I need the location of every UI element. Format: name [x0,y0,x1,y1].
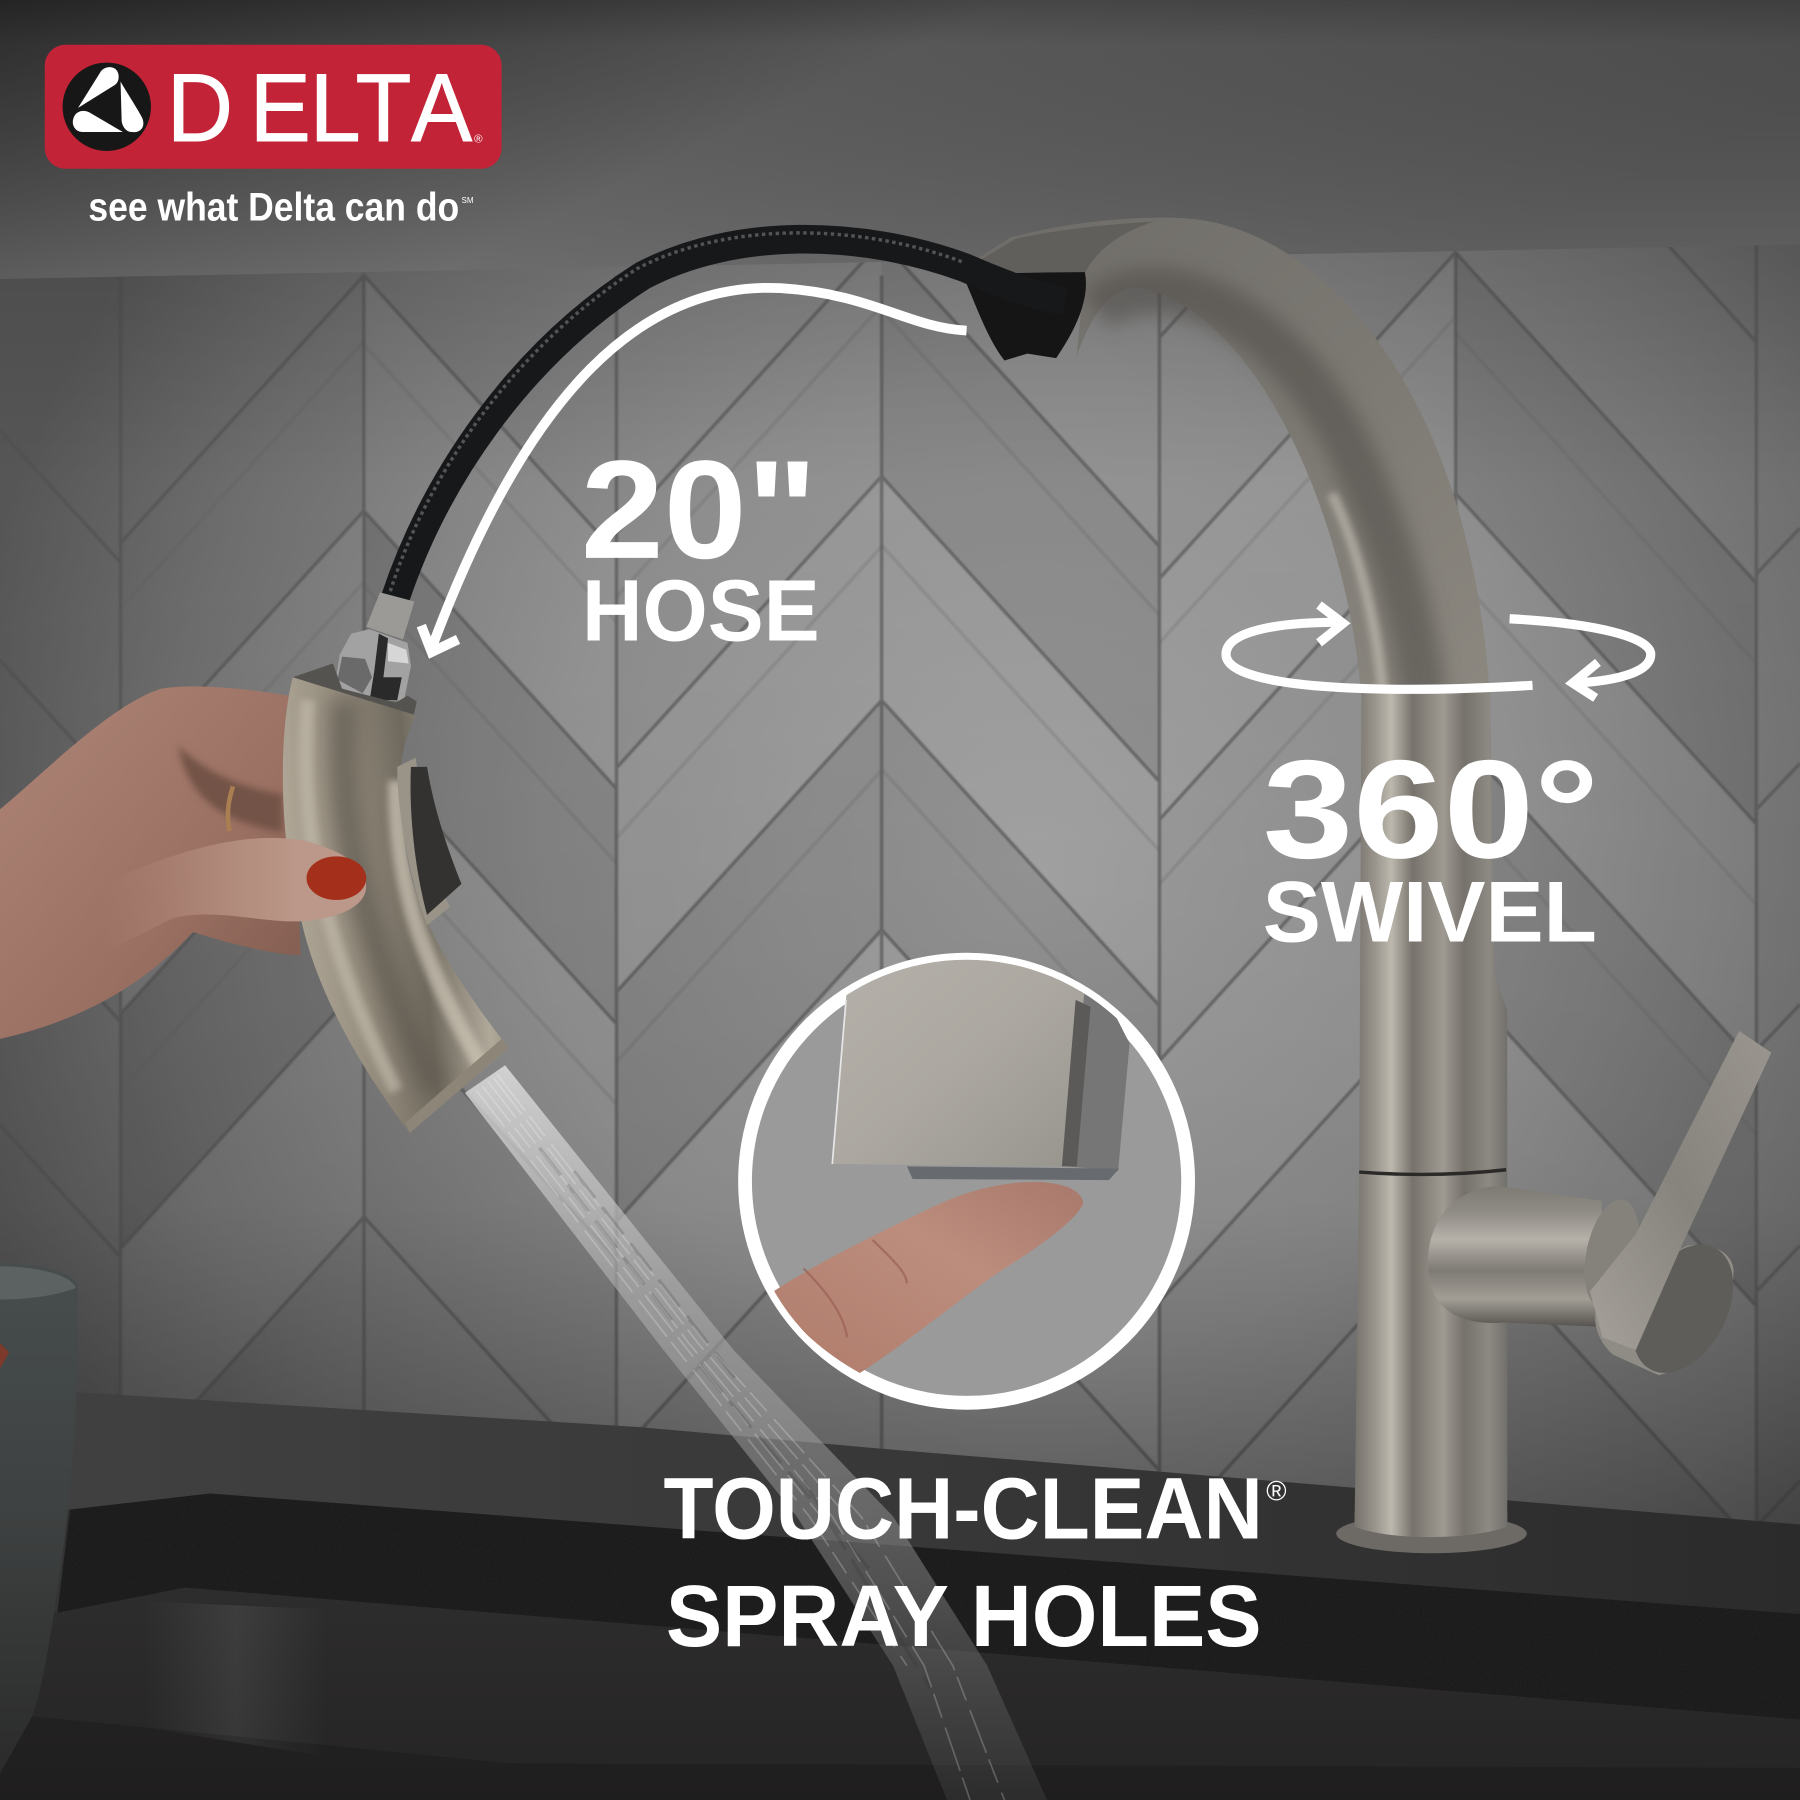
spray mode button [397,758,461,925]
water spray [465,1065,1047,1800]
chrome swivel nut [335,629,411,703]
hand [0,686,301,1039]
swivel collar seam [1359,1170,1506,1174]
logo mark [63,63,151,151]
callout: 360 degree swivel [1263,731,1599,960]
spout front [832,953,1088,1166]
hose length arrow [421,288,967,652]
spout left highlight [832,1000,846,1164]
spray holes [907,1166,1119,1180]
finger creases [804,1240,907,1337]
handle arm [1428,1186,1607,1327]
spray wand head [283,592,509,1133]
callout: 20 inch hose: 20" [581,431,817,588]
base flange [1336,1513,1527,1553]
callout: 20 inch hose: HOSE [582,563,820,660]
pull-down hose [390,233,1065,599]
ring [228,786,233,831]
red fingernail [307,856,366,900]
sink lower shadow [0,1710,1800,1800]
callout: touch-clean spray holes: ® [1266,1475,1287,1506]
sink basin [0,1588,1800,1800]
wand brushed highlights [306,700,482,1091]
gooseneck spout [959,218,1490,700]
faucet: main body and gooseneck [959,218,1771,1553]
registered mark: ® [474,133,483,145]
fingertip [771,1182,1083,1373]
callout: touch-clean spray holes: SPRAY HOLES [666,1568,1262,1665]
handle cap [1595,1245,1734,1375]
sink sheen [143,1601,327,1756]
herringbone tile backsplash [0,246,1800,1524]
spout side [1067,991,1130,1171]
thumb [103,838,366,953]
faucet column [1355,689,1507,1521]
logo badge [45,45,502,169]
inset circle: touch-clean spout detail [745,953,1188,1403]
wand top cap [293,664,417,717]
tagline: see what Delta can do [88,184,459,229]
wordmark: DELTA [167,54,473,162]
spout edge [1062,1000,1091,1166]
palm and fingers [0,686,301,1039]
handle collar [1576,1194,1648,1313]
callout: 360 degree swivel: 360° [1263,731,1599,888]
callout: touch-clean spray holes [664,1460,1287,1665]
right swivel arrow [1510,619,1651,698]
callout: 360 degree swivel: SWIVEL [1263,864,1597,960]
Delta logo [45,45,502,229]
callout: 20 inch hose [581,431,820,660]
mug at left edge [0,1263,78,1774]
callout: touch-clean spray holes: TOUCH-CLEAN [664,1460,1263,1557]
spout opening [962,272,1086,360]
counter surface [0,1383,1800,1614]
wand body [283,677,509,1133]
chrome ferrule [366,592,414,639]
service mark: SM [461,196,474,205]
finger fold [178,746,282,832]
swivel arrows [1226,605,1651,698]
wand nozzle lip [405,1039,509,1133]
countertop [0,1383,1800,1800]
handle lever [1590,1031,1771,1350]
left swivel arrow [1226,605,1533,689]
upper wall background [0,0,1800,298]
speckled stone front edge [57,1493,1800,1720]
